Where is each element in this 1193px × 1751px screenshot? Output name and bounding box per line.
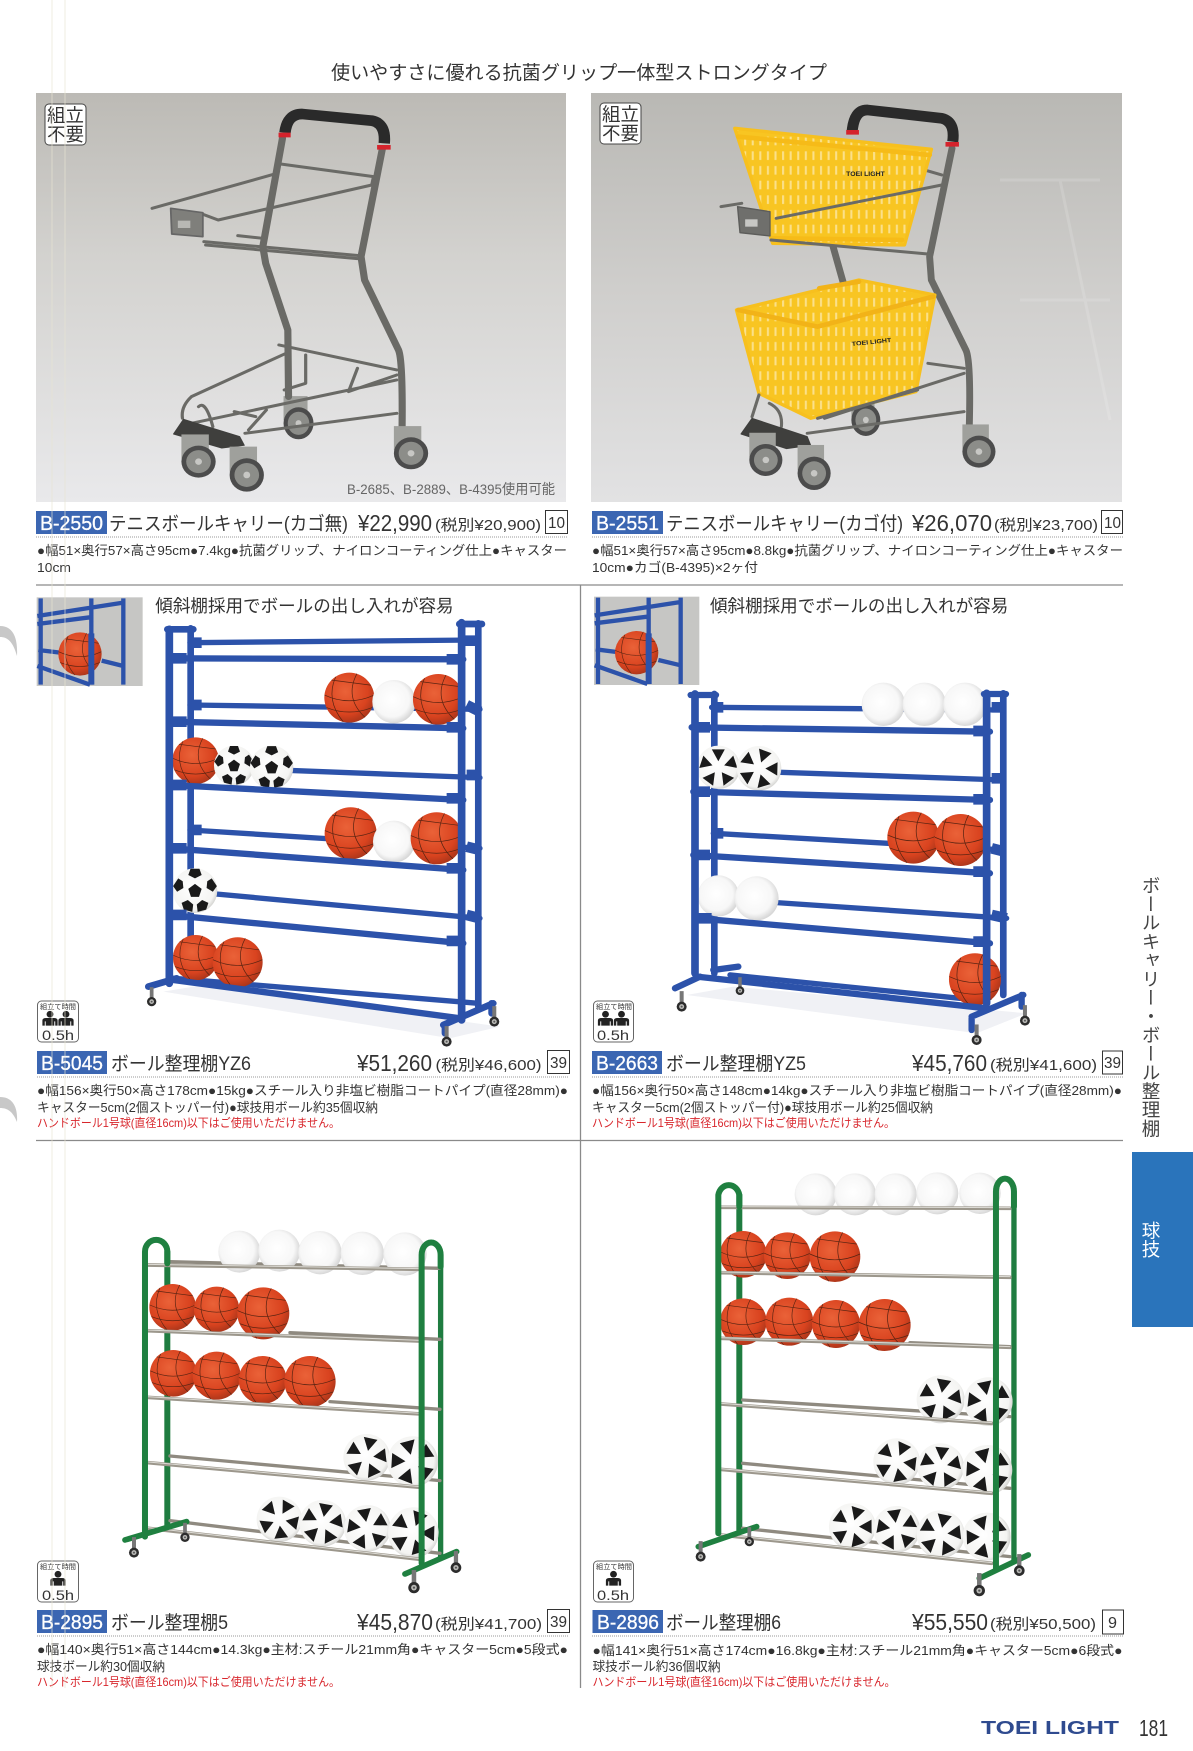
side tab: category bbox=[1132, 1152, 1193, 1327]
product info: B-2895: B-2895 bbox=[41, 1612, 103, 1634]
balls bbox=[172, 673, 464, 987]
assembly time icon B-2663: 組立て時間 bbox=[596, 1002, 632, 1011]
product info: B-5045: ¥51,260 bbox=[356, 1050, 432, 1076]
assembly time icon B-2896: 組立て時間 bbox=[596, 1562, 632, 1571]
assembly time icon B-2896: 0.5h bbox=[597, 1587, 629, 1603]
product info: B-2551: ¥26,070 bbox=[911, 510, 992, 536]
badge: no assembly: 組立 bbox=[602, 104, 639, 125]
casters bbox=[696, 1527, 1025, 1596]
product info: B-2551: 10 bbox=[1104, 515, 1121, 532]
footer brand: TOEI LIGHT bbox=[981, 1718, 1119, 1738]
product info: B-2550: ●幅51×奥行57×高さ95cm●7.4kg●抗菌グリップ、ナイロンコーティング仕上●キャスター bbox=[37, 543, 567, 558]
compatibility note: B-2685、B-2889、B-4395使用可能 bbox=[347, 481, 555, 497]
product info: B-2663: 39 bbox=[1104, 1055, 1121, 1072]
product info: B-2896: ボール整理棚6 bbox=[666, 1612, 781, 1634]
product info: B-2895: (税別¥41,700) bbox=[435, 1616, 542, 1633]
side tab label: 球技 bbox=[1138, 1221, 1164, 1258]
product info: B-2551: B-2551 bbox=[596, 513, 659, 535]
product info: B-2896 bbox=[592, 1609, 1124, 1689]
product info: B-2896: 9 bbox=[1108, 1615, 1117, 1632]
rack B-2663 blue five shelves bbox=[594, 596, 1030, 1045]
product info: B-5045: B-5045 bbox=[41, 1053, 103, 1075]
panel: cart photo B-2550 bbox=[36, 93, 566, 502]
page number: 181 bbox=[1139, 1715, 1168, 1741]
product info: B-2663: ハンドボール1号球(直径16cm)以下はご使用いただけません。 bbox=[592, 1115, 895, 1130]
product info: B-2663: B-2663 bbox=[596, 1053, 658, 1075]
cart illustration without baskets bbox=[152, 114, 428, 492]
product info: B-2663: (税別¥41,600) bbox=[990, 1057, 1097, 1074]
casters bbox=[129, 1523, 461, 1593]
product info: B-2896: ハンドボール1号球(直径16cm)以下はご使用いただけません。 bbox=[592, 1674, 896, 1689]
side heading: ボールキャリー・ボール整理棚 bbox=[1138, 876, 1164, 1138]
badge: no assembly: 不要 bbox=[47, 124, 84, 145]
product info: B-2663: ボール整理棚YZ5 bbox=[666, 1053, 806, 1075]
inset photo bbox=[594, 597, 699, 685]
assembly time icon B-5045: 0.5h bbox=[42, 1027, 74, 1043]
product info: B-2896: 球技ボール約36個収納 bbox=[592, 1659, 720, 1674]
product info: B-5045: ●幅156×奥行50×高さ178cm●15kg●スチール入り非塩ビ樹脂コートパイプ(直径28mm)● bbox=[37, 1083, 568, 1098]
product info: B-5045: 39 bbox=[550, 1055, 567, 1072]
product info: B-2550 bbox=[36, 510, 568, 575]
badge: no assembly: 組立 bbox=[47, 105, 84, 126]
assembly time icon B-2895: 0.5h bbox=[42, 1587, 74, 1603]
product info: B-5045: キャスター5cm(2個ストッパー付)●球技用ボール約35個収納 bbox=[37, 1100, 378, 1115]
product info: B-2663: ●幅156×奥行50×高さ148cm●14kg●スチール入り非塩ビ樹脂コートパイプ(直径28mm)● bbox=[592, 1083, 1122, 1098]
product info: B-5045: ハンドボール1号球(直径16cm)以下はご使用いただけません。 bbox=[37, 1115, 340, 1130]
casters bbox=[677, 977, 1030, 1045]
product info: B-2896: B-2896 bbox=[597, 1612, 659, 1634]
product info: B-2896: ●幅141×奥行51×高さ174cm●16.8kg●主材:スチール21mm角●キャスター5cm●6段式● bbox=[592, 1643, 1122, 1658]
assembly time icon B-5045: 組立て時間 bbox=[40, 1002, 76, 1011]
assembly time icon B-2663: 0.5h bbox=[597, 1027, 629, 1043]
product info: B-2550: B-2550 bbox=[40, 513, 103, 535]
assembly time icon B-5045 bbox=[38, 1001, 78, 1043]
assembly time icon B-2663 bbox=[594, 1001, 634, 1043]
product info: B-2551 bbox=[592, 510, 1123, 575]
product info: B-2896: (税別¥50,500) bbox=[990, 1616, 1096, 1633]
product info: B-2895: ボール整理棚5 bbox=[111, 1612, 228, 1634]
product info: B-5045: (税別¥46,600) bbox=[436, 1057, 542, 1074]
cart illustration with yellow baskets: TOEI LIGHT bbox=[846, 171, 885, 178]
product info: B-2550: 10 bbox=[548, 515, 565, 532]
product info: B-2663: キャスター5cm(2個ストッパー付)●球技用ボール約25個収納 bbox=[592, 1100, 933, 1115]
balls bbox=[697, 683, 1001, 1005]
panel: cart photo B-2551 bbox=[591, 93, 1122, 502]
product info: B-2663 bbox=[592, 1050, 1123, 1130]
product info: B-2896: ¥55,550 bbox=[911, 1609, 988, 1635]
rack B-2895 green five shelves bbox=[125, 1230, 461, 1593]
balls bbox=[149, 1230, 446, 1565]
product info: B-2895: ●幅140×奥行51×高さ144cm●14.3kg●主材:スチール21mm角●キャスター5cm●5段式● bbox=[37, 1642, 568, 1657]
product info: B-2895: 球技ボール約30個収納 bbox=[37, 1659, 165, 1674]
cart illustration with yellow baskets bbox=[721, 110, 995, 490]
product info: B-2551: テニスボールキャリー(カゴ付) bbox=[666, 513, 903, 535]
product info: B-2895: 39 bbox=[550, 1614, 567, 1631]
badge: no assembly bbox=[600, 103, 641, 144]
product info: B-2551: ●幅51×奥行57×高さ95cm●8.8kg●抗菌グリップ、ナイロンコーティング仕上●キャスター bbox=[592, 543, 1123, 558]
product info: B-2895 bbox=[37, 1609, 570, 1689]
rack B-2896 green six shelves bbox=[696, 1172, 1028, 1596]
inset caption: 傾斜棚採用でボールの出し入れが容易 bbox=[155, 596, 454, 616]
casters bbox=[147, 987, 499, 1047]
product info: B-5045: ボール整理棚YZ6 bbox=[111, 1053, 251, 1075]
title: 使いやすさに優れる抗菌グリップ一体型ストロングタイプ bbox=[331, 62, 827, 84]
assembly time icon B-2895 bbox=[38, 1561, 78, 1603]
badge: no assembly bbox=[45, 104, 86, 145]
badge: no assembly: 不要 bbox=[602, 123, 639, 144]
cart illustration with yellow baskets: TOEI LIGHT bbox=[852, 337, 892, 348]
inset caption: 傾斜棚採用でボールの出し入れが容易 bbox=[710, 596, 1008, 616]
assembly time icon B-2895: 組立て時間 bbox=[40, 1562, 76, 1571]
balls bbox=[720, 1172, 1018, 1567]
rack B-5045 blue six shelves bbox=[37, 596, 500, 1047]
assembly time icon B-2896 bbox=[594, 1561, 634, 1603]
product info: B-2895: ハンドボール1号球(直径16cm)以下はご使用いただけません。 bbox=[37, 1674, 340, 1689]
product info: B-2551: 10cm●カゴ(B-4395)×2ヶ付 bbox=[592, 560, 758, 575]
product info: B-2551: (税別¥23,700) bbox=[994, 517, 1098, 534]
product info: B-2550: ¥22,990 bbox=[357, 510, 432, 536]
product info: B-5045 bbox=[37, 1050, 570, 1130]
product info: B-2663: ¥45,760 bbox=[911, 1050, 987, 1076]
product info: B-2550: テニスボールキャリー(カゴ無) bbox=[109, 513, 348, 535]
product info: B-2550: (税別¥20,900) bbox=[435, 517, 541, 534]
inset photo bbox=[37, 597, 143, 686]
product info: B-2550: 10cm bbox=[37, 560, 71, 575]
product info: B-2895: ¥45,870 bbox=[356, 1609, 433, 1635]
